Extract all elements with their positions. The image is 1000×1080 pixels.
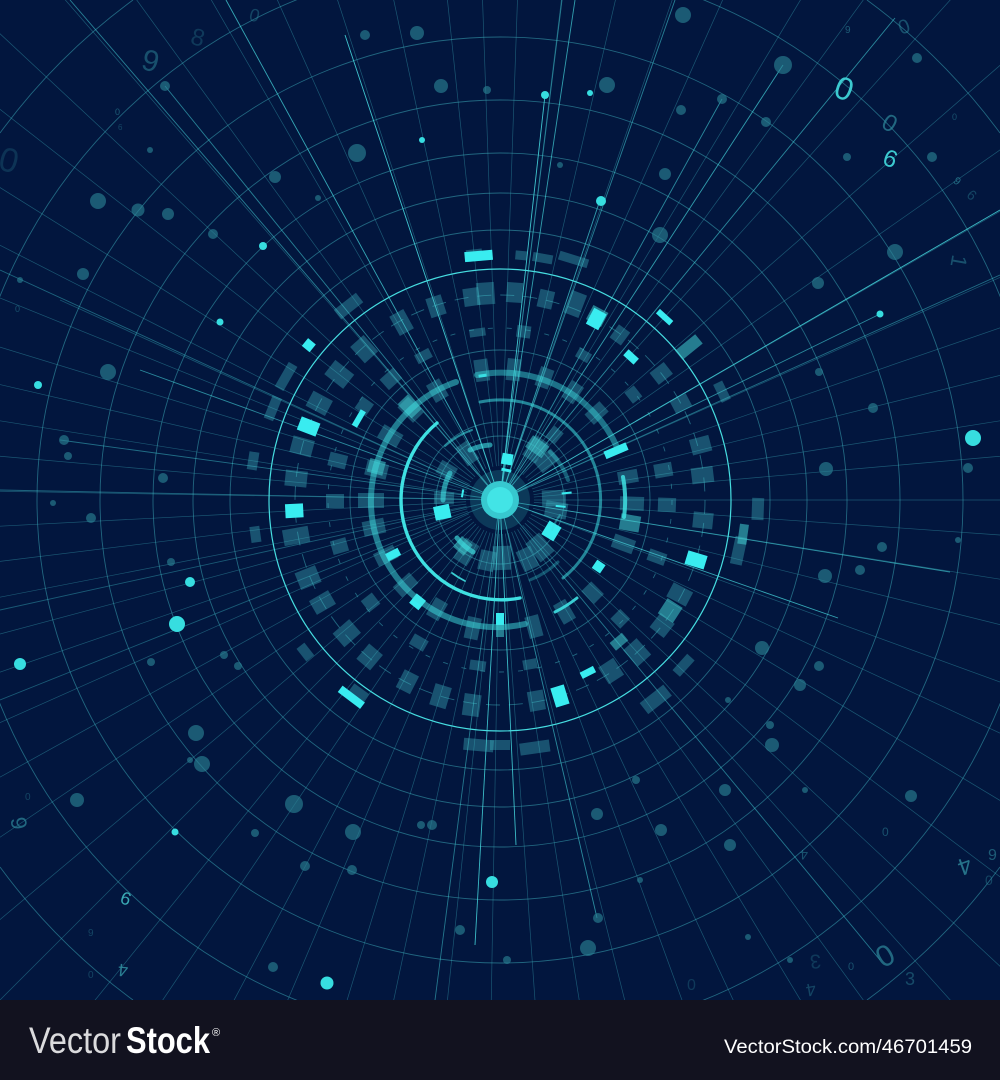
- bright outer ring: [269, 269, 731, 731]
- scattered digits: 4: [954, 850, 976, 880]
- footer logo wordmark: Stock: [126, 1020, 210, 1061]
- scattered digits: 0: [830, 69, 859, 109]
- medium data blocks: [367, 305, 749, 651]
- scattered digits: 0: [247, 4, 262, 26]
- bright data blocks: [285, 250, 708, 709]
- footer logo wordmark: [29, 1020, 220, 1061]
- scattered digits: 9: [880, 143, 902, 173]
- scattered digits: 0: [848, 961, 854, 973]
- scattered digits: 0: [952, 112, 957, 122]
- scattered digits: 9: [988, 847, 997, 864]
- scattered digits: 0: [985, 872, 993, 888]
- progress arcs: [371, 373, 625, 627]
- footer image id: VectorStock.com/46701459: [724, 1037, 972, 1058]
- dim data blocks: [247, 249, 764, 756]
- scattered digits: 3: [809, 949, 822, 972]
- footer bar: [0, 1000, 1000, 1080]
- scattered digits: 8: [188, 23, 208, 53]
- scattered digits: 6: [964, 186, 980, 204]
- scattered digits: 4: [117, 960, 129, 980]
- glowing core: [470, 470, 530, 530]
- scattered digits: 9: [138, 43, 163, 80]
- scattered digits: 4: [804, 979, 818, 1000]
- scattered digits: 0: [15, 304, 20, 314]
- footer logo wordmark: Vector: [29, 1020, 121, 1061]
- scattered digits: 0: [870, 938, 901, 975]
- scattered digits: 0: [25, 792, 31, 803]
- scattered digits: 0: [88, 970, 94, 981]
- scattered digits: 4: [800, 847, 808, 863]
- scattered digits: 9: [845, 25, 851, 36]
- scattered digits: 0: [115, 107, 120, 117]
- scattered digits: 6: [118, 887, 134, 910]
- scattered digits: 9: [951, 175, 963, 188]
- scattered digits: 9: [88, 928, 94, 939]
- scattered digits: 9: [5, 815, 32, 831]
- scattered digits: 6: [118, 123, 123, 132]
- scattered digits: 0: [687, 977, 696, 994]
- scattered digits: 0: [882, 825, 889, 839]
- footer logo wordmark: ®: [212, 1027, 220, 1039]
- scattered digits: 3: [905, 969, 915, 989]
- scattered digits: 1: [945, 253, 972, 269]
- scattered digits: 0: [877, 109, 902, 139]
- scattered digits: 0: [895, 15, 913, 40]
